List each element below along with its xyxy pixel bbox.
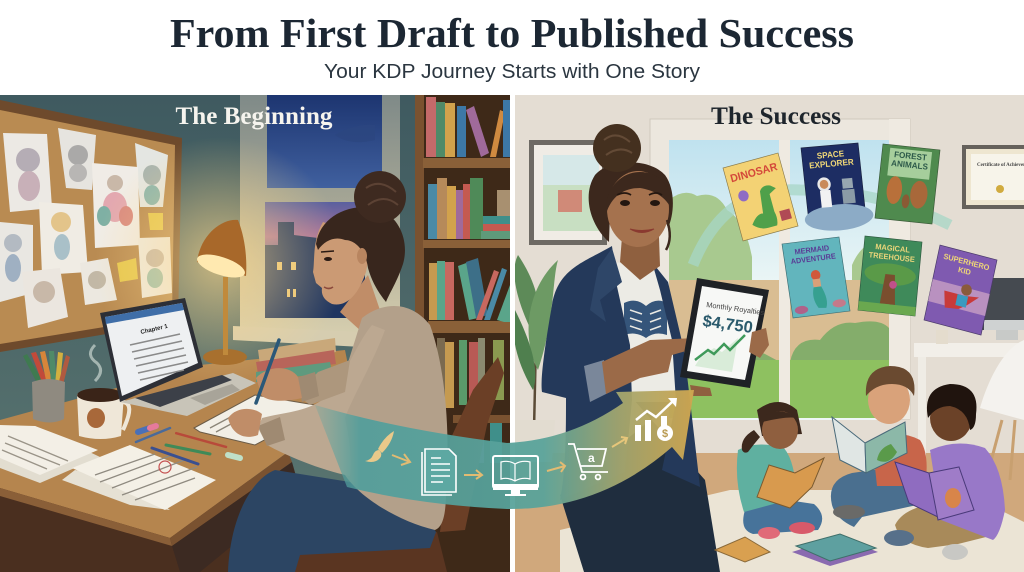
book: space explorer [797, 142, 875, 233]
book: superhero kid: KID [957, 265, 972, 277]
writer woman [228, 171, 448, 572]
potted plant [515, 255, 558, 420]
pencil cup [23, 351, 70, 422]
book: mermaid adventure: ADVENTURE [790, 251, 836, 266]
chair [287, 357, 504, 572]
icon: shopping cart: a [588, 451, 595, 465]
patio window with garden [650, 119, 950, 420]
book: magical treehouse: MAGICAL [875, 242, 911, 255]
icon: rising chart with coin: $ [662, 428, 668, 440]
title: From First Draft to Published Success [170, 10, 854, 56]
panel heading: the beginning: The Beginning [176, 103, 333, 130]
window at dusk [233, 95, 400, 347]
book: dinosar [723, 153, 798, 241]
icon: monitor with open book [493, 456, 538, 496]
child: boy reading dragon book [831, 366, 927, 527]
notebook on desk [194, 395, 327, 445]
book: space explorer: SPACE [816, 148, 845, 161]
book: dinosar: DINOSAR [729, 161, 779, 185]
arrow: manuscript to digital book [464, 470, 482, 479]
success woman [542, 124, 769, 572]
icon: rising chart with coin [635, 398, 677, 441]
desk [0, 350, 350, 572]
laptop: Chapter 1 [140, 324, 169, 336]
book: space explorer: EXPLORER [809, 156, 854, 170]
success woman: $4,750 [701, 312, 754, 337]
panel: the success [513, 95, 1024, 572]
panel: the beginning [0, 95, 510, 572]
framed picture [529, 140, 607, 245]
corkboard with character sketches [0, 100, 182, 352]
book: superhero kid [924, 245, 997, 335]
pens and erasers [136, 422, 240, 464]
book: superhero kid: SUPERHERO [943, 252, 990, 273]
child: girl reading orange book [737, 402, 824, 539]
child: boy reading purple book [884, 384, 1005, 560]
icon: shopping cart [568, 444, 608, 479]
framed certificate [962, 145, 1024, 209]
arrow: digital book to store [547, 462, 565, 472]
icon: manuscript document [422, 449, 456, 495]
laptop [100, 298, 256, 416]
subtitle: Your KDP Journey Starts with One Story [324, 61, 700, 83]
stack of books [256, 338, 336, 382]
book covers [723, 142, 997, 335]
book: mermaid adventure: MERMAID [794, 243, 830, 256]
desk and monitor [914, 278, 1024, 467]
books on the floor [715, 534, 878, 566]
book: magical treehouse [858, 236, 922, 316]
book: forest animals: ANIMALS [891, 159, 929, 172]
arrow: store to royalties [612, 437, 627, 447]
curved journey arrow [315, 390, 694, 509]
book: forest animals: FOREST [894, 150, 927, 163]
book: mermaid adventure [782, 237, 850, 318]
icon: paintbrush [365, 431, 394, 462]
floor and rug [515, 453, 1024, 572]
success woman: Monthly Royalties [706, 300, 765, 317]
white chair [980, 340, 1024, 480]
coffee mug [77, 345, 129, 439]
book: magical treehouse: TREEHOUSE [868, 250, 915, 264]
book: forest animals [875, 144, 940, 224]
desk lamp [112, 145, 330, 370]
manuscript pages [0, 425, 216, 510]
bookshelf [415, 95, 510, 572]
arrow: brush to manuscript [392, 454, 410, 465]
panel heading: the success: The Success [711, 103, 841, 130]
